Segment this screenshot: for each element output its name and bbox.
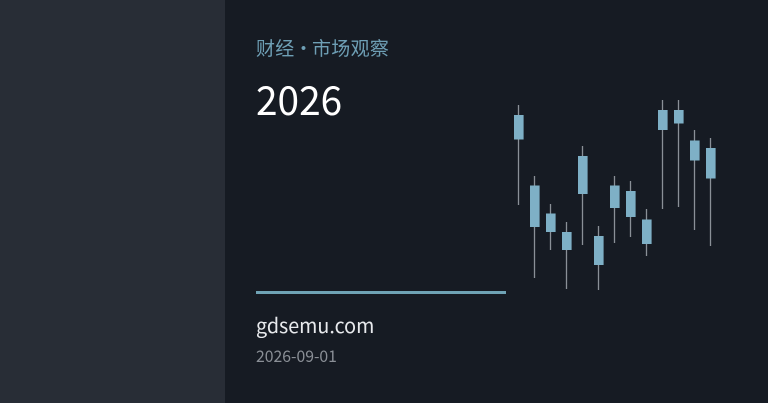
- candlestick chart: [514, 100, 716, 290]
- site name: gdsemu.com: [256, 310, 374, 339]
- accent rule: [256, 291, 506, 294]
- category heading: [256, 34, 389, 61]
- category heading: 市场观察: [312, 34, 389, 61]
- category heading: 财经: [256, 34, 295, 61]
- category heading: ·: [294, 34, 313, 61]
- title: year: 2026: [256, 69, 342, 127]
- left sidebar panel: [0, 0, 225, 403]
- date: 2026-09-01: [256, 343, 337, 367]
